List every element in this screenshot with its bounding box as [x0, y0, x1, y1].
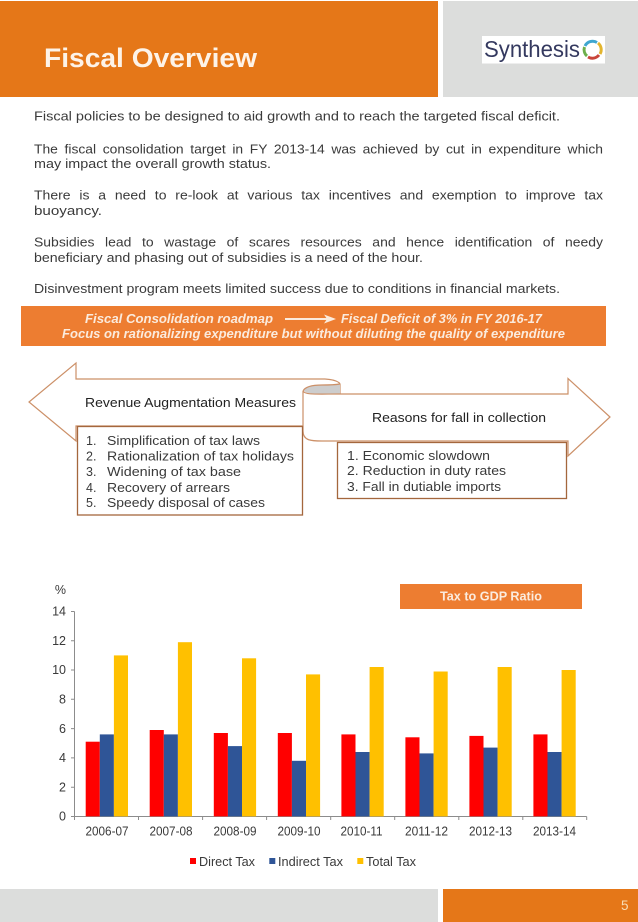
y axis labels: 0 [59, 810, 66, 824]
y axis labels: 4 [59, 751, 66, 765]
banner: fiscal consolidation roadmap: Fiscal Deficit of 3% in FY 2016-17 [341, 312, 543, 326]
y axis labels: % [55, 583, 66, 597]
series: Direct Tax [86, 730, 547, 816]
title: Fiscal Overview [44, 43, 258, 73]
x axis labels: 2006-07 [86, 824, 129, 838]
chart title: Tax to GDP Ratio [400, 584, 582, 609]
x axis labels: 2011-12 [405, 824, 448, 838]
text block: fiscal policy paragraphs: buoyancy. [34, 204, 102, 218]
box: revenue measures list: 1. [86, 434, 96, 448]
page number: 5 [621, 898, 629, 913]
box: revenue measures list [78, 426, 302, 515]
arrow: reasons for fall in collection: Reasons for fall in collection [372, 410, 546, 425]
text block: fiscal policy paragraphs: Fiscal policies to be designed to aid growth and to reach the targeted fiscal deficit. [34, 110, 560, 124]
text block: fiscal policy paragraphs: beneficiary and phasing out of subsidies is a need of the hour. [34, 251, 423, 265]
text block: fiscal policy paragraphs: Subsidies lead to wastage of scares resources and hence identification of needy [34, 236, 604, 250]
arrow: revenue augmentation measures: Revenue Augmentation Measures [85, 395, 297, 410]
arrow: reasons for fall in collection [303, 378, 610, 456]
banner: fiscal consolidation roadmap: Fiscal Consolidation roadmap [85, 312, 273, 326]
box: revenue measures list: Widening of tax base [107, 465, 241, 479]
x axis labels: 2008-09 [214, 824, 257, 838]
arrow: revenue augmentation measures [29, 363, 325, 441]
panel: header [0, 1, 638, 97]
box: revenue measures list: 3. [86, 465, 96, 479]
chart title: Tax to GDP Ratio: Tax to GDP Ratio [440, 590, 542, 604]
box: reasons list [338, 442, 566, 498]
text block: fiscal policy paragraphs [34, 110, 604, 296]
x axis labels [86, 824, 576, 838]
y axis labels: 12 [52, 634, 66, 648]
logo: Synthesis: Synthesis [484, 36, 580, 62]
y axis labels: 6 [59, 722, 66, 736]
bar chart: tax to GDP ratio [52, 583, 587, 869]
y axis labels: 2 [59, 780, 66, 794]
text block: fiscal policy paragraphs: may impact the overall growth status. [34, 157, 271, 171]
y axis labels: 10 [52, 663, 66, 677]
arrow: roadmap to deficit [285, 314, 336, 324]
x axis labels: 2010-11 [340, 824, 383, 838]
legend: Indirect Tax [278, 855, 344, 869]
box: revenue measures list: 4. [86, 481, 96, 495]
x axis labels: 2007-08 [150, 824, 193, 838]
x axis labels: 2013-14 [533, 824, 576, 838]
legend: Direct Tax [199, 855, 256, 869]
box: revenue measures list: Speedy disposal of cases [107, 496, 265, 510]
box: revenue measures list: 5. [86, 496, 96, 510]
series: Indirect Tax [100, 734, 562, 816]
legend: Total Tax [366, 855, 417, 869]
box: revenue measures list: Rationalization of tax holidays [107, 450, 294, 464]
box: revenue measures list: Simplification of tax laws [107, 434, 260, 448]
box: reasons list: 2. Reduction in duty rates [347, 464, 506, 478]
panel: footer [0, 889, 638, 922]
x axis labels: 2012-13 [469, 824, 512, 838]
box: reasons list: 1. Economic slowdown [347, 449, 490, 463]
x axis labels: 2009-10 [278, 824, 321, 838]
box: reasons list: 3. Fall in dutiable imports [347, 480, 501, 494]
series: Total Tax [114, 642, 576, 816]
text block: fiscal policy paragraphs: Disinvestment program meets limited success due to conditions in financial markets. [34, 282, 560, 296]
banner: fiscal consolidation roadmap: Focus on rationalizing expenditure but without diluting the quality of expenditure [62, 327, 565, 341]
y axis labels: 8 [59, 692, 66, 706]
text block: fiscal policy paragraphs: There is a need to re-look at various tax incentives and exemption to improve tax [34, 188, 604, 202]
y axis labels [52, 583, 66, 824]
y axis labels: 14 [52, 604, 66, 618]
box: revenue measures list: Recovery of arrears [107, 481, 230, 495]
legend [190, 855, 417, 869]
box: revenue measures list: 2. [86, 450, 96, 464]
text block: fiscal policy paragraphs: The fiscal consolidation target in FY 2013-14 was achieved by cut in expenditure which [34, 142, 603, 156]
banner: fiscal consolidation roadmap [21, 306, 606, 346]
